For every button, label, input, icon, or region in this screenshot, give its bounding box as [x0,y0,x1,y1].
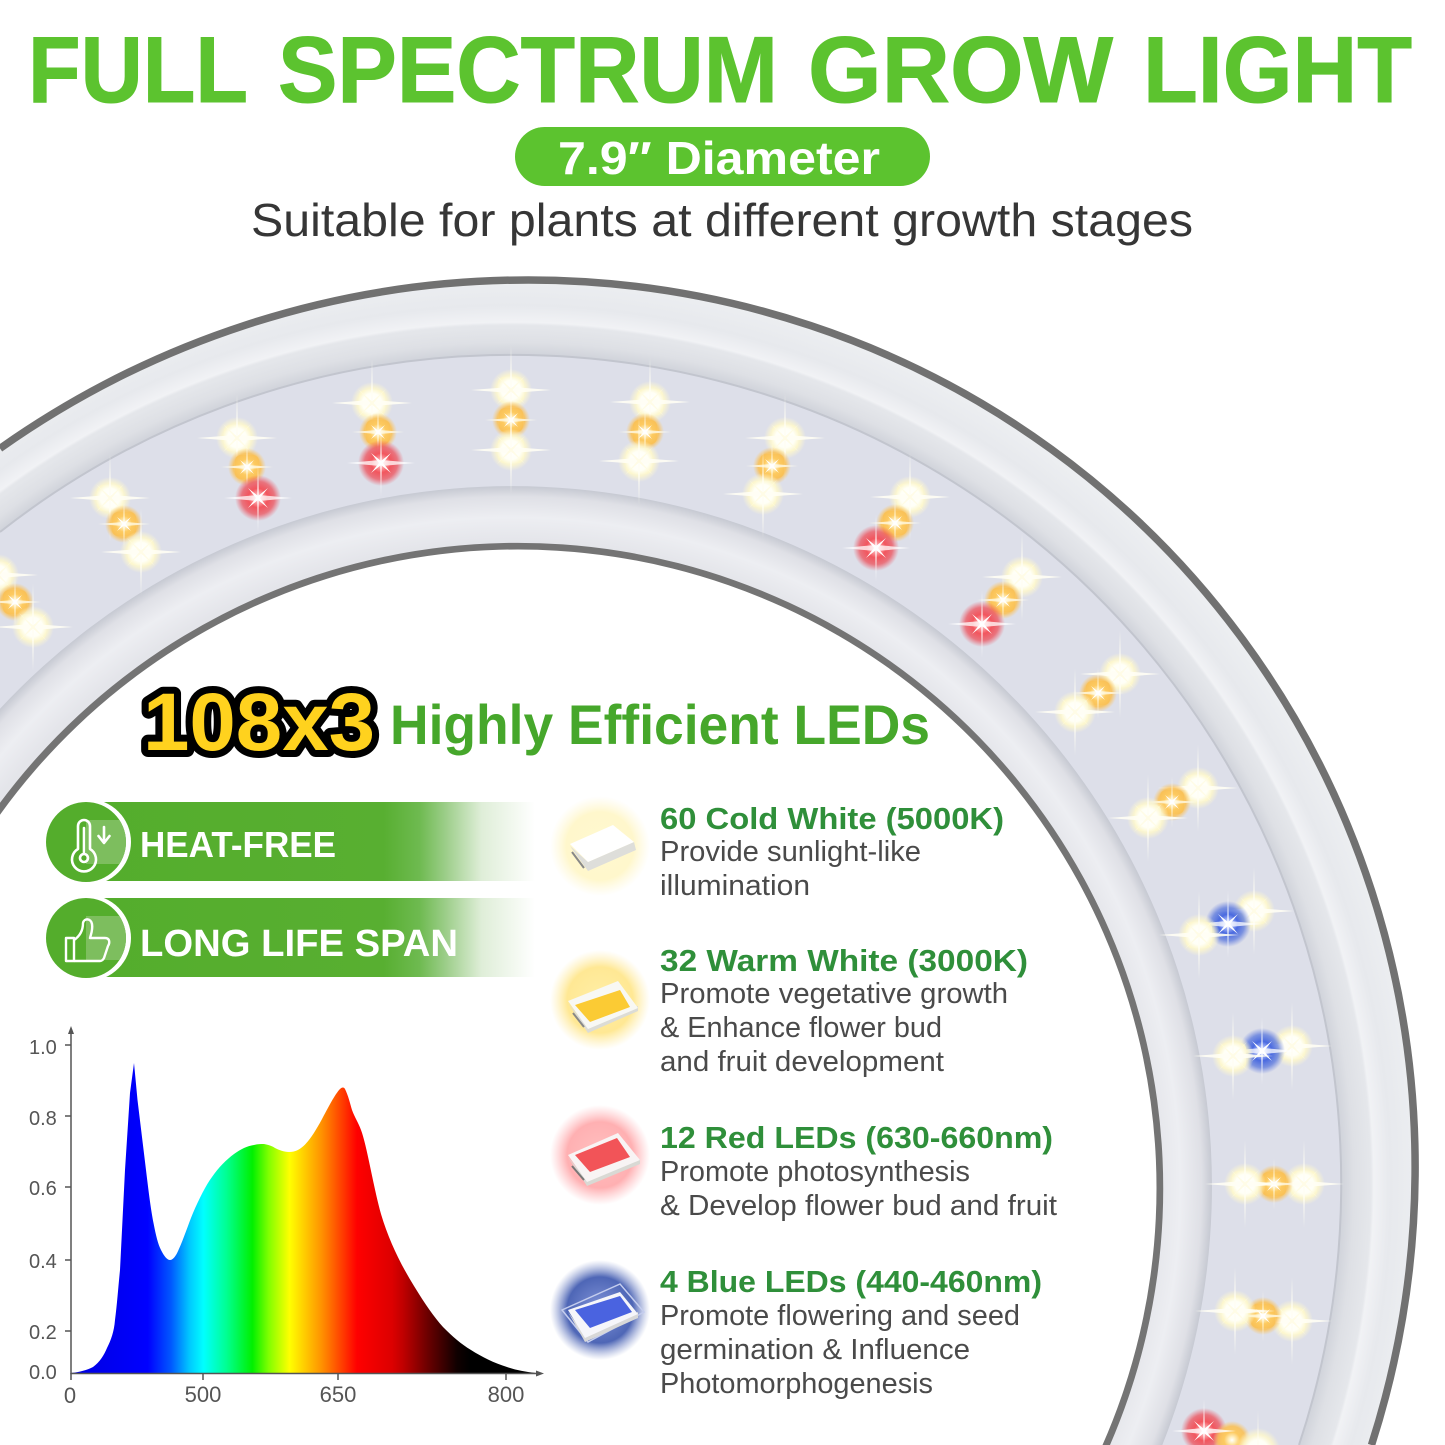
badge: heat-free: HEAT-FREE [140,824,336,865]
LED group 2 [70,454,181,596]
y axis labels: 0.0 [29,1362,57,1384]
icon: warm white LED [550,950,650,1050]
title: SPECTRUM [278,17,778,122]
y axis labels: 1.0 [29,1037,57,1059]
LED group 16 [1172,1399,1280,1445]
y axis labels: 0.6 [29,1178,57,1200]
text block: blue LEDs: Photomorphogenesis [660,1368,933,1400]
text block: cold white: 60 Cold White (5000K) [660,801,1004,836]
spectrum curve [71,1063,536,1373]
LED group 8 [842,453,950,582]
badge: long life span [45,895,535,981]
subtitle: Suitable for plants at different growth stages [251,194,1193,246]
x axis labels: 650 [320,1382,356,1407]
chart axes [65,1030,540,1380]
badge: long life span: LONG LIFE SPAN [140,923,458,965]
text block: red LEDs [660,1120,1057,1222]
diameter pill: 7.9″ Diameter [558,132,880,184]
text block: warm white: Promote vegetative growth [660,978,1008,1010]
icon: thumbs up [66,919,109,961]
title: GROW [808,17,1113,122]
x axis labels: 800 [488,1382,524,1407]
text block: blue LEDs: 4 Blue LEDs (440-460nm) [660,1264,1042,1299]
LED group 7 [723,394,825,538]
text block: red LEDs: 12 Red LEDs (630-660nm) [660,1120,1053,1155]
y axis labels: 0.8 [29,1108,57,1130]
axis arrows [68,1026,544,1376]
x axis labels: 500 [185,1382,221,1407]
LED ring lamp [0,280,1415,1445]
text block: warm white: and fruit development [660,1046,944,1078]
text block: cold white: Provide sunlight-like [660,836,921,868]
LED group 10 [1035,630,1160,756]
text block: blue LEDs [660,1264,1042,1400]
icon: cold white LED [550,796,650,896]
text block: blue LEDs: Promote flowering and seed [660,1300,1020,1332]
LED group 3 [197,394,292,532]
LED group 11 [1108,744,1238,862]
text block: warm white [660,943,1028,1078]
LED group 13 [1193,1002,1332,1100]
diameter pill [515,127,930,186]
title [28,17,1412,122]
x axis labels [64,1382,524,1408]
text block: warm white: 32 Warm White (3000K) [660,943,1028,978]
badge: heat-free [45,799,535,885]
icon: red LED [550,1105,650,1205]
icon: thermometer [72,820,110,871]
title: FULL [28,17,248,122]
LED group 1 [0,531,73,671]
y axis labels [29,1037,57,1384]
text block: cold white: illumination [660,870,810,902]
x axis labels: 0 [64,1383,76,1408]
text block: cold white [660,801,1004,902]
spectrum chart [29,1026,544,1408]
LED group 9 [948,533,1062,658]
title: LIGHT [1143,17,1412,122]
text block: warm white: & Enhance flower bud [660,1012,942,1044]
icon: blue LED [550,1260,650,1360]
LED group 14 [1205,1140,1344,1228]
LED count number: 108x3 [143,677,375,768]
LED group 5 [471,346,551,494]
text block: blue LEDs: germination & Influence [660,1334,970,1366]
text block: red LEDs: Promote photosynthesis [660,1156,970,1188]
y axis labels: 0.2 [29,1322,57,1344]
text block: red LEDs: & Develop flower bud and fruit [660,1190,1057,1222]
LED group 12 [1159,867,1294,979]
y axis labels: 0.4 [29,1251,57,1273]
LED group 4 [332,359,415,497]
LED group 6 [599,358,690,505]
LED count heading: Highly Efficient LEDs [390,693,930,756]
LED group 15 [1195,1267,1332,1365]
